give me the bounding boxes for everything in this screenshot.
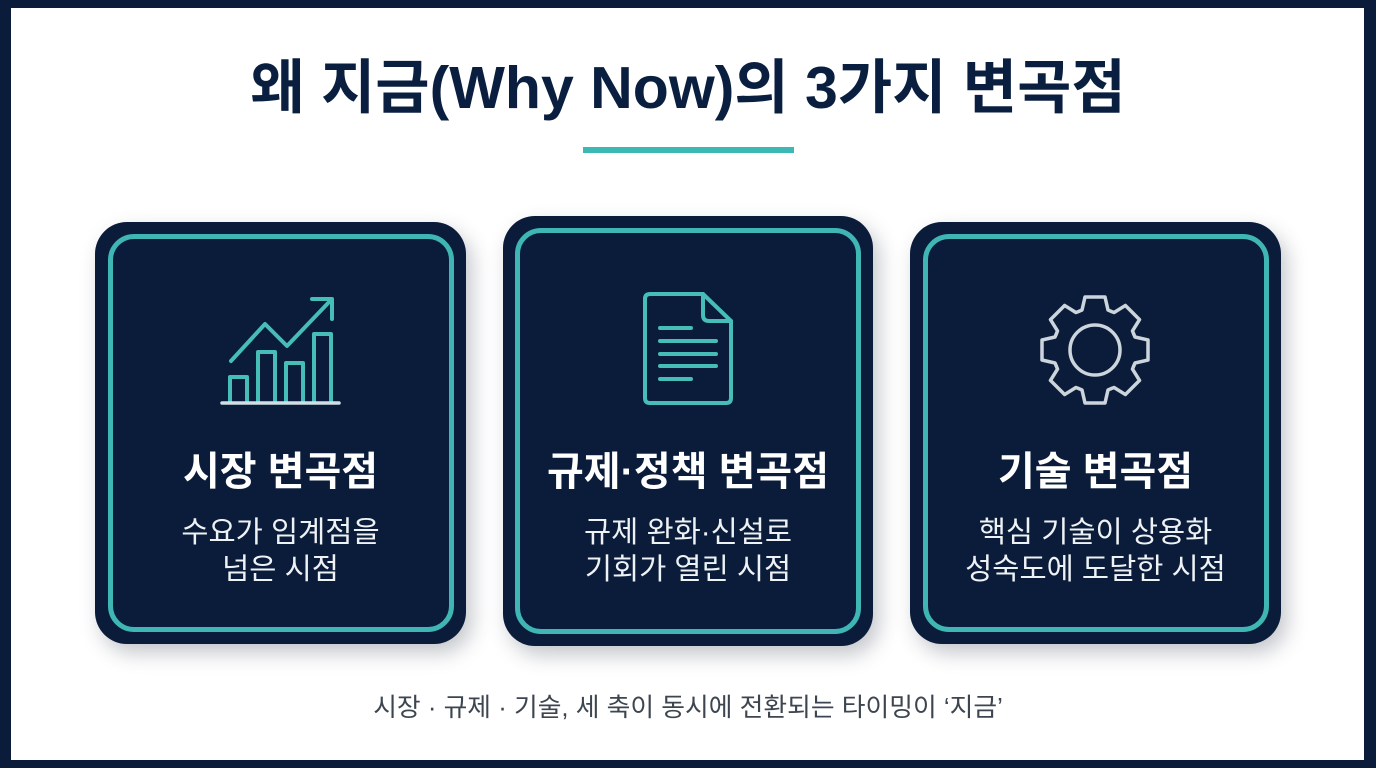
description bbox=[181, 516, 380, 586]
panel: regulation and policy inflection bbox=[503, 216, 873, 646]
panel: technology inflection bbox=[910, 222, 1281, 644]
icon: gear bbox=[1040, 295, 1150, 405]
description: 수요가 임계점을 bbox=[181, 516, 380, 549]
icon: document bbox=[643, 292, 733, 405]
description bbox=[965, 516, 1226, 586]
title: 왜 지금(Why Now)의 3가지 변곡점 bbox=[250, 55, 1126, 121]
description: 규제 완화·신설로 bbox=[584, 516, 792, 549]
heading: 기술 변곡점 bbox=[998, 450, 1193, 494]
description: 성숙도에 도달한 시점 bbox=[965, 553, 1226, 586]
panel border bbox=[923, 234, 1269, 632]
description: 기회가 열린 시점 bbox=[585, 553, 791, 586]
icon: bar chart with rising arrow bbox=[220, 297, 341, 405]
panel: market inflection bbox=[95, 222, 466, 644]
description bbox=[584, 516, 792, 586]
description: 핵심 기술이 상용화 bbox=[979, 516, 1212, 549]
heading: 시장 변곡점 bbox=[183, 450, 378, 494]
title underline bbox=[583, 147, 794, 153]
heading: 규제·정책 변곡점 bbox=[547, 450, 829, 494]
panel border bbox=[108, 234, 454, 632]
description: 넘은 시점 bbox=[222, 553, 339, 586]
panel border bbox=[515, 228, 861, 634]
footer caption: 시장 · 규제 · 기술, 세 축이 동시에 전환되는 타이밍이 ‘지금’ bbox=[373, 694, 1003, 722]
